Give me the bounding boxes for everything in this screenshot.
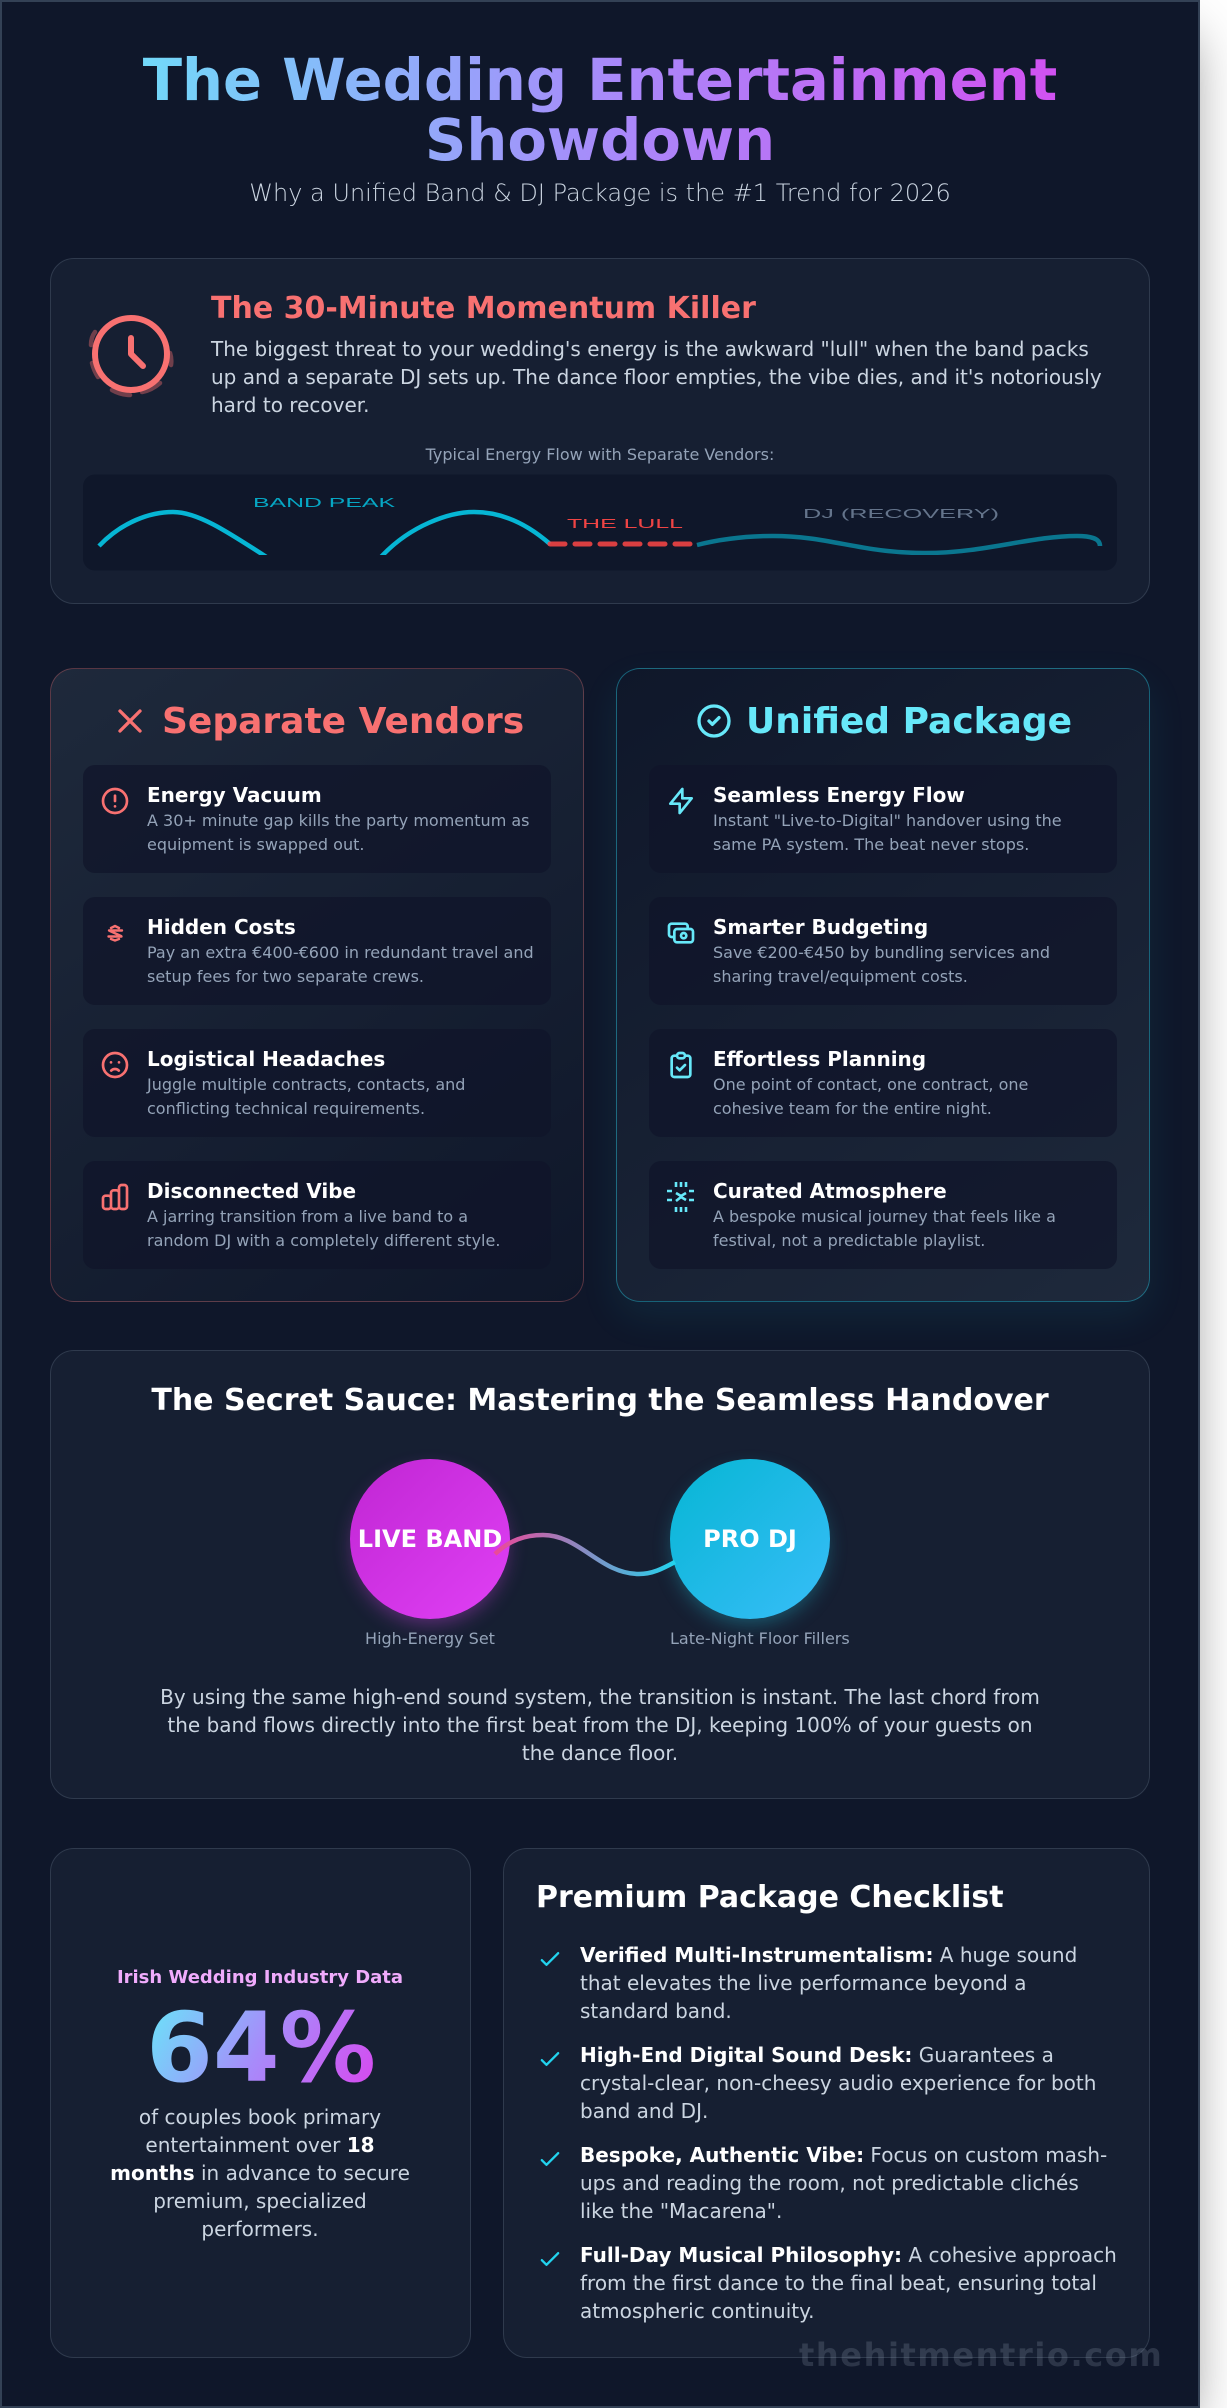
icon: check circle [697, 704, 731, 738]
circle: live band [350, 1459, 510, 1619]
item: curated atmosphere: A bespoke musical journey that feels like a [713, 1207, 1056, 1226]
chart caption: Typical Energy Flow with Separate Vendors: [426, 445, 774, 464]
item: energy vacuum: Energy Vacuum [147, 783, 322, 807]
title: Showdown [425, 106, 775, 174]
checklist item 1: standard band. [580, 1999, 732, 2023]
text: handover explanation [160, 1685, 1040, 1765]
title: The Wedding Entertainment [143, 46, 1057, 114]
watermark: thehitmentrio.com [799, 2336, 1163, 2374]
item: hidden costs [83, 897, 551, 1005]
checklist item 2: crystal-clear, non-cheesy audio experience for both [580, 2071, 1096, 2095]
checklist item 3: ups and reading the room, not predictable clichés [580, 2171, 1079, 2195]
label: industry data: Irish Wedding Industry Data [117, 1967, 403, 1988]
item: effortless planning: One point of contact, one contract, one [713, 1075, 1028, 1094]
checklist item 3: like the "Macarena". [580, 2199, 782, 2223]
item: smarter budgeting: sharing travel/equipment costs. [713, 967, 968, 986]
panel: secret sauce [50, 1350, 1150, 1799]
stat: 64 percent: 64% [146, 1992, 376, 2104]
heading: unified package: Unified Package [746, 701, 1072, 742]
heading: separate vendors: Separate Vendors [162, 701, 524, 742]
checklist item 3: Bespoke, Authentic Vibe: Focus on custom mash- [580, 2143, 1107, 2167]
circle: pro dj [670, 1459, 830, 1619]
item: logistical headaches: Juggle multiple contracts, contacts, and [147, 1075, 465, 1094]
chart: energy flow [83, 474, 1117, 570]
panel: statistic [50, 1848, 471, 2358]
item: energy vacuum: equipment is swapped out. [147, 835, 364, 854]
item: smarter budgeting: Save €200-€450 by bundling services and [713, 943, 1050, 962]
item: disconnected vibe: A jarring transition from a live band to a [147, 1207, 468, 1226]
heading: checklist: Premium Package Checklist [536, 1880, 1004, 1915]
text: momentum description: The biggest threat to your wedding's energy is the awkward "lull" when the band packs [211, 337, 1089, 361]
title [52, 50, 1148, 170]
connector: handover wave [494, 1532, 676, 1576]
panel: separate vendors [50, 668, 584, 1302]
text: handover explanation: the dance floor. [522, 1741, 678, 1765]
item: smarter budgeting: Smarter Budgeting [713, 915, 928, 939]
text: handover explanation: By using the same high-end sound system, the transition is instant. The last chord from [160, 1685, 1040, 1709]
item: hidden costs: Hidden Costs [147, 915, 296, 939]
item: smarter budgeting [649, 897, 1117, 1005]
label: late-night floor fillers: Late-Night Floor Fillers [670, 1629, 850, 1648]
text: statistic description [110, 2105, 410, 2241]
item: effortless planning: cohesive team for the entire night. [713, 1099, 992, 1118]
item: seamless energy flow [649, 765, 1117, 873]
item: effortless planning [649, 1029, 1117, 1137]
item: hidden costs: setup fees for two separate crews. [147, 967, 424, 986]
checklist item 3 [540, 2143, 1107, 2223]
item: disconnected vibe: random DJ with a completely different style. [147, 1231, 500, 1250]
checklist item 1: Verified Multi-Instrumentalism: A huge sound [580, 1943, 1077, 1967]
item: seamless energy flow: same PA system. The beat never stops. [713, 835, 1029, 854]
circle: pro dj: PRO DJ [703, 1525, 797, 1553]
panel: checklist [503, 1848, 1150, 2358]
chart: energy flow: THE LULL [567, 516, 683, 531]
checklist item 4: Full-Day Musical Philosophy: A cohesive approach [580, 2243, 1117, 2267]
item: disconnected vibe: Disconnected Vibe [147, 1179, 356, 1203]
checklist item 4 [540, 2243, 1117, 2323]
item: energy vacuum [83, 765, 551, 873]
heading: secret sauce: The Secret Sauce: Mastering the Seamless Handover [151, 1383, 1049, 1418]
text: statistic description: entertainment over 18 [145, 2133, 375, 2157]
chart: energy flow: DJ (RECOVERY) [803, 506, 999, 521]
item: hidden costs: Pay an extra €400-€600 in redundant travel and [147, 943, 534, 962]
circle: live band: LIVE BAND [358, 1525, 502, 1553]
panel: unified package [616, 668, 1150, 1302]
chart: energy flow: BAND PEAK [253, 495, 396, 510]
checklist item 4: atmospheric continuity. [580, 2299, 814, 2323]
icon: x mark [118, 709, 142, 733]
item: curated atmosphere: Curated Atmosphere [713, 1179, 947, 1203]
item: effortless planning: Effortless Planning [713, 1047, 926, 1071]
checklist item 1 [540, 1943, 1077, 2023]
item: energy vacuum: A 30+ minute gap kills the party momentum as [147, 811, 530, 830]
checklist item 4: from the first dance to the final beat, ensuring total [580, 2271, 1097, 2295]
text: statistic description: of couples book primary [139, 2105, 381, 2129]
text: statistic description: months in advance to secure [110, 2161, 410, 2185]
text: statistic description: performers. [201, 2217, 319, 2241]
checklist item 2: High-End Digital Sound Desk: Guarantees a [580, 2043, 1054, 2067]
checklist item 2 [540, 2043, 1096, 2123]
icon: clock [88, 315, 174, 398]
item: logistical headaches: conflicting technical requirements. [147, 1099, 425, 1118]
item: logistical headaches [83, 1029, 551, 1137]
text: momentum description [210, 337, 1102, 417]
item: logistical headaches: Logistical Headaches [147, 1047, 385, 1071]
subtitle: Why a Unified Band & DJ Package is the #1 Trend for 2026 [249, 179, 951, 207]
heading: momentum killer: The 30-Minute Momentum Killer [211, 291, 756, 326]
item: curated atmosphere [649, 1161, 1117, 1269]
checklist item 2: band and DJ. [580, 2099, 708, 2123]
text: statistic description: premium, specialized [153, 2189, 367, 2213]
label: high-energy set: High-Energy Set [365, 1629, 495, 1648]
item: disconnected vibe [83, 1161, 551, 1269]
checklist item 1: that elevates the live performance beyond a [580, 1971, 1026, 1995]
text: momentum description: hard to recover. [211, 393, 370, 417]
text: momentum description: up and a separate DJ sets up. The dance floor empties, the vibe dies, and it's notoriously [211, 365, 1102, 389]
text: handover explanation: the band flows directly into the first beat from the DJ, keeping 100% of your guests on [167, 1713, 1033, 1737]
item: seamless energy flow: Instant "Live-to-Digital" handover using the [713, 811, 1062, 830]
item: curated atmosphere: festival, not a predictable playlist. [713, 1231, 985, 1250]
panel: momentum killer [50, 258, 1150, 604]
item: seamless energy flow: Seamless Energy Flow [713, 783, 965, 807]
